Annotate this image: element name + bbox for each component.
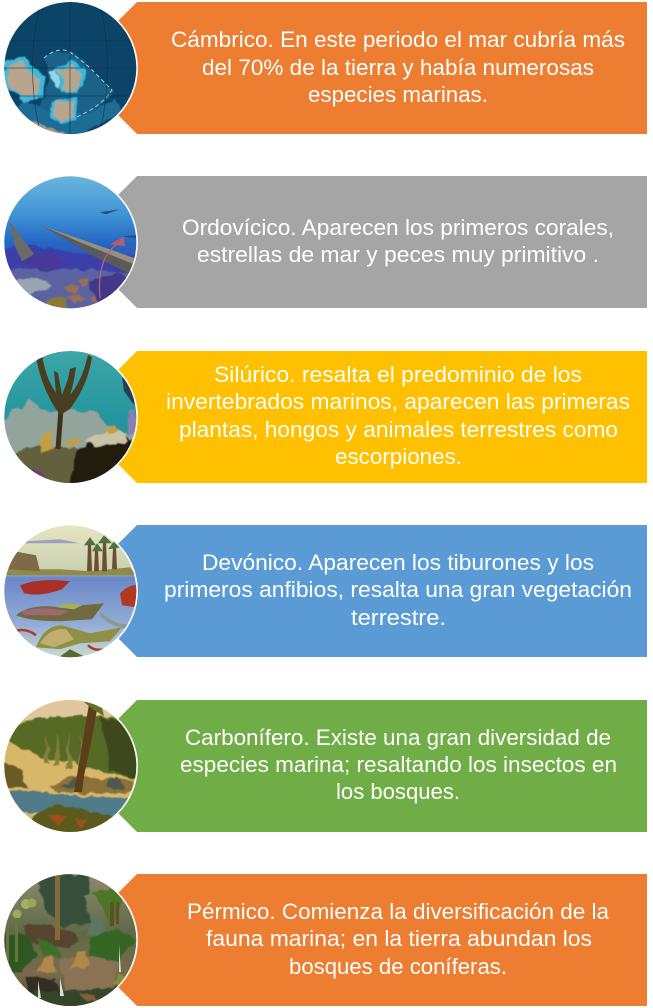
- text: Devónico: primeros anfibios, resalta una gran vegetación: [164, 577, 632, 602]
- text: Cámbrico: del 70% de la tierra y había numerosas: [202, 55, 594, 80]
- panel: Cámbrico: [0, 0, 647, 140]
- text: Carbonífero: Carbonífero. Existe una gran diversidad de: [185, 725, 611, 750]
- image: paleogeographic globe: [0, 0, 140, 140]
- panel: Devónico: [0, 523, 647, 659]
- text: Carbonífero: los bosques.: [336, 779, 460, 804]
- image: Carboniferous swamp forest: [0, 698, 140, 838]
- yellow arrow banner: [112, 351, 647, 483]
- green arrow banner: [112, 700, 647, 832]
- text: Pérmico: bosques de coníferas.: [289, 954, 507, 979]
- blue arrow banner: [112, 525, 647, 657]
- text: Pérmico: [187, 899, 609, 979]
- panel: Pérmico: [0, 872, 647, 1008]
- image: Devonian fishes: [0, 523, 140, 659]
- text: Ordovícico: [182, 215, 614, 267]
- text: Devónico: Devónico. Aparecen los tiburones y los: [202, 550, 594, 575]
- text: Devónico: [164, 550, 632, 630]
- text: Pérmico: fauna marina; en la tierra abundan los: [206, 926, 592, 951]
- panel: Carbonífero: [0, 698, 647, 838]
- image: Permian conifer forest: [0, 872, 140, 1008]
- image: Silurian coral reef: [0, 349, 140, 485]
- text: Ordovícico: estrellas de mar y peces muy primitivo .: [197, 242, 599, 267]
- panel: Silúrico: [0, 349, 647, 485]
- orange arrow banner: [112, 874, 647, 1006]
- text: Silúrico: [166, 362, 630, 469]
- text: Cámbrico: [171, 27, 625, 107]
- text: Cámbrico: Cámbrico. En este periodo el mar cubría más: [171, 27, 625, 52]
- text: Silúrico: escorpiones.: [335, 444, 462, 469]
- text: Carbonífero: [180, 725, 617, 804]
- text: Silúrico: plantas, hongos y animales terrestres como: [179, 417, 618, 442]
- text: Pérmico: Pérmico. Comienza la diversificación de la: [187, 899, 609, 924]
- panel: Ordovícico: [0, 174, 647, 310]
- text: Cámbrico: especies marinas.: [308, 82, 488, 107]
- text: Carbonífero: especies marina; resaltando los insectos en: [180, 752, 617, 777]
- gray arrow banner: [112, 176, 647, 308]
- text: Silúrico: Silúrico. resalta el predominio de los: [214, 362, 582, 387]
- text: Ordovícico: Ordovícico. Aparecen los primeros corales,: [182, 215, 614, 240]
- text: Devónico: terrestre.: [351, 605, 446, 630]
- orange arrow banner: [112, 2, 647, 134]
- image: Ordovician seabed: [0, 174, 140, 310]
- text: Silúrico: invertebrados marinos, aparecen las primeras: [166, 389, 630, 414]
